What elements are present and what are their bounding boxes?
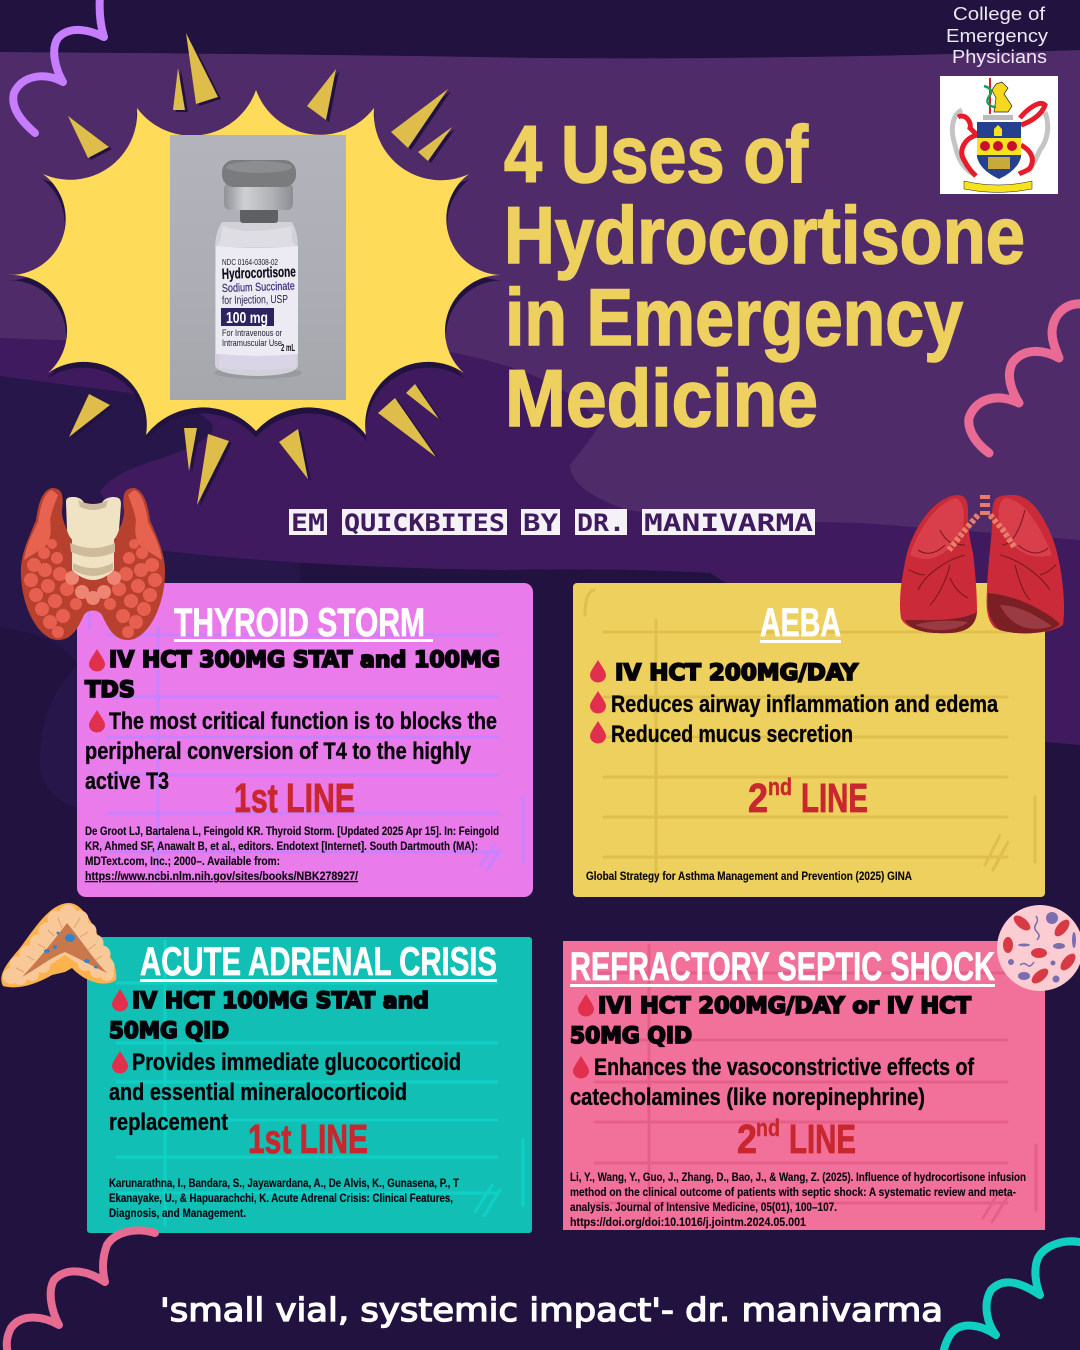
college name: Physicians: [952, 46, 1047, 67]
mechanism text: and essential mineralocorticoid: [109, 1079, 407, 1106]
title: [504, 110, 1025, 444]
reference: [570, 1171, 1026, 1229]
squiggle: teal bottom right: [943, 1241, 1080, 1350]
icon: blood drop: [578, 994, 594, 1017]
reference: De Groot LJ, Bartalena L, Feingold KR. Thyroid Storm. [Updated 2025 Apr 15]. In: Feingold: [85, 825, 499, 838]
icon: blood drop: [590, 660, 606, 683]
reference: Ekanayake, U., & Hapuarachchi, K. Acute Adrenal Crisis: Clinical Features,: [109, 1192, 453, 1205]
starburst with vial: [7, 33, 504, 507]
icon: adrenal gland: [1, 903, 116, 987]
reference: https://www.ncbi.nlm.nih.gov/sites/books/NBK278927/: [85, 870, 359, 883]
line of therapy: [748, 774, 868, 821]
reference: Karunarathna, I., Bandara, S., Jayawardana, A., De Alvis, K., Gunasena, P., T: [109, 1177, 460, 1190]
mechanism text: [85, 708, 497, 795]
reference: method on the clinical outcome of patients with septic shock: A systematic review and meta-: [570, 1186, 1016, 1199]
vial photo: 100 mg: [226, 310, 268, 327]
reference: KR, Ahmed SF, Anawalt B, et al., editors. Endotext [Internet]. South Dartmouth (MA):: [85, 840, 478, 853]
line of therapy: nd: [768, 774, 792, 801]
icon: blood drop: [89, 710, 105, 733]
icon: blood drop: [590, 721, 606, 744]
dose text: [85, 648, 500, 703]
panel: refractory septic shock: [563, 941, 1045, 1230]
panel: AEBA: [573, 583, 1045, 897]
title: in Emergency: [505, 273, 963, 363]
mechanism text: Enhances the vasoconstrictive effects of: [594, 1054, 975, 1081]
college crest logo: [940, 76, 1058, 194]
college name: Emergency: [946, 25, 1049, 46]
mechanism text: Provides immediate glucocorticoid: [132, 1049, 461, 1076]
dose text: [109, 989, 429, 1044]
mechanism text: active T3: [85, 768, 169, 795]
panel: acute adrenal crisis: [87, 937, 532, 1233]
vial photo: Intramuscular Use: [222, 338, 282, 349]
icon: blood drop: [112, 1051, 128, 1074]
dose text: IVI HCT 200MG/DAY or IV HCT: [598, 994, 971, 1019]
mechanism text: peripheral conversion of T4 to the highly: [85, 738, 471, 765]
reference: [109, 1177, 460, 1220]
subtitle text: [291, 509, 814, 537]
icon: blood drop: [590, 691, 606, 714]
title: 4 Uses of: [504, 110, 809, 200]
college name: [946, 3, 1049, 67]
icon: blood drop: [112, 989, 128, 1012]
dose text: IV HCT 300MG STAT and 100MG: [109, 648, 500, 673]
dose text: 50MG QID: [109, 1019, 229, 1044]
vial photo: Sodium Succinate: [222, 280, 295, 295]
burst shadow: [7, 94, 504, 441]
line of therapy: LINE: [789, 1116, 856, 1162]
college name: College of: [953, 3, 1046, 24]
effect text: [611, 691, 998, 748]
squiggle: pink right: [969, 304, 1080, 453]
vial photo: for Injection, USP: [222, 294, 288, 307]
reference: Diagnosis, and Management.: [109, 1207, 246, 1220]
subtitle text: DR.: [577, 509, 625, 537]
mechanism text: The most critical function is to blocks the: [109, 708, 497, 735]
line of therapy: 1st LINE: [248, 1116, 368, 1162]
squiggle: purple top left: [13, 0, 104, 133]
mechanism text: replacement: [109, 1109, 228, 1136]
reference: Global Strategy for Asthma Management and Prevention (2025) GINA: [586, 870, 912, 883]
line of therapy: nd: [756, 1115, 780, 1142]
subtitle: [289, 509, 815, 537]
mechanism text: [109, 1049, 461, 1136]
icon: lungs: [900, 495, 1064, 633]
panel: thyroid storm: [77, 583, 533, 897]
vial photo: [170, 135, 346, 400]
subtitle text: EM: [291, 509, 325, 537]
subtitle text: MANIVARMA: [644, 509, 814, 537]
subtitle text: BY: [523, 509, 559, 537]
spikes: [68, 33, 455, 507]
vial photo: 2 mL: [281, 343, 295, 354]
squiggle: pink bottom left: [7, 1230, 155, 1350]
line of therapy: 2: [748, 775, 768, 821]
line of therapy: 2: [737, 1116, 757, 1162]
icon: thyroid: [21, 488, 165, 640]
subtitle tiles: [289, 509, 815, 535]
vial photo: Hydrocortisone: [222, 263, 296, 283]
line of therapy: 1st LINE: [234, 775, 355, 821]
vial photo: NDC 0164-0308-02: [222, 258, 278, 267]
dose text: TDS: [85, 678, 135, 703]
reference: analysis. Journal of Intensive Medicine, 05(01), 100–107.: [570, 1201, 837, 1214]
dose text: 50MG QID: [570, 1024, 692, 1049]
reference: https://doi.org/doi:10.1016/j.jointm.2024.05.001: [570, 1216, 806, 1229]
title: Medicine: [505, 354, 818, 444]
icon: blood drop: [89, 649, 105, 672]
dose text: [570, 994, 971, 1049]
heading: ACUTE ADRENAL CRISIS: [140, 940, 497, 984]
vial photo: For Intravenous or: [222, 328, 282, 339]
burst: [8, 90, 503, 435]
heading: AEBA: [760, 601, 841, 645]
mechanism text: catecholamines (like norepinephrine): [570, 1084, 925, 1111]
heading: THYROID STORM: [174, 601, 425, 645]
mechanism text: [570, 1054, 975, 1111]
icon: septic blood cells: [997, 905, 1080, 991]
reference: MDText.com, Inc.; 2000–. Available from:: [85, 855, 280, 868]
reference: [85, 825, 499, 883]
line of therapy: LINE: [801, 775, 868, 821]
subtitle text: QUICKBITES: [344, 509, 505, 537]
effect text: Reduces airway inflammation and edema: [611, 691, 998, 718]
dose text: IV HCT 200MG/DAY: [615, 661, 859, 686]
effect text: Reduced mucus secretion: [611, 721, 853, 748]
line of therapy: [737, 1115, 856, 1162]
icon: blood drop: [573, 1056, 589, 1078]
footer quote: 'small vial, systemic impact'- dr. manivarma: [160, 1291, 943, 1329]
dose text: IV HCT 100MG STAT and: [132, 989, 429, 1014]
